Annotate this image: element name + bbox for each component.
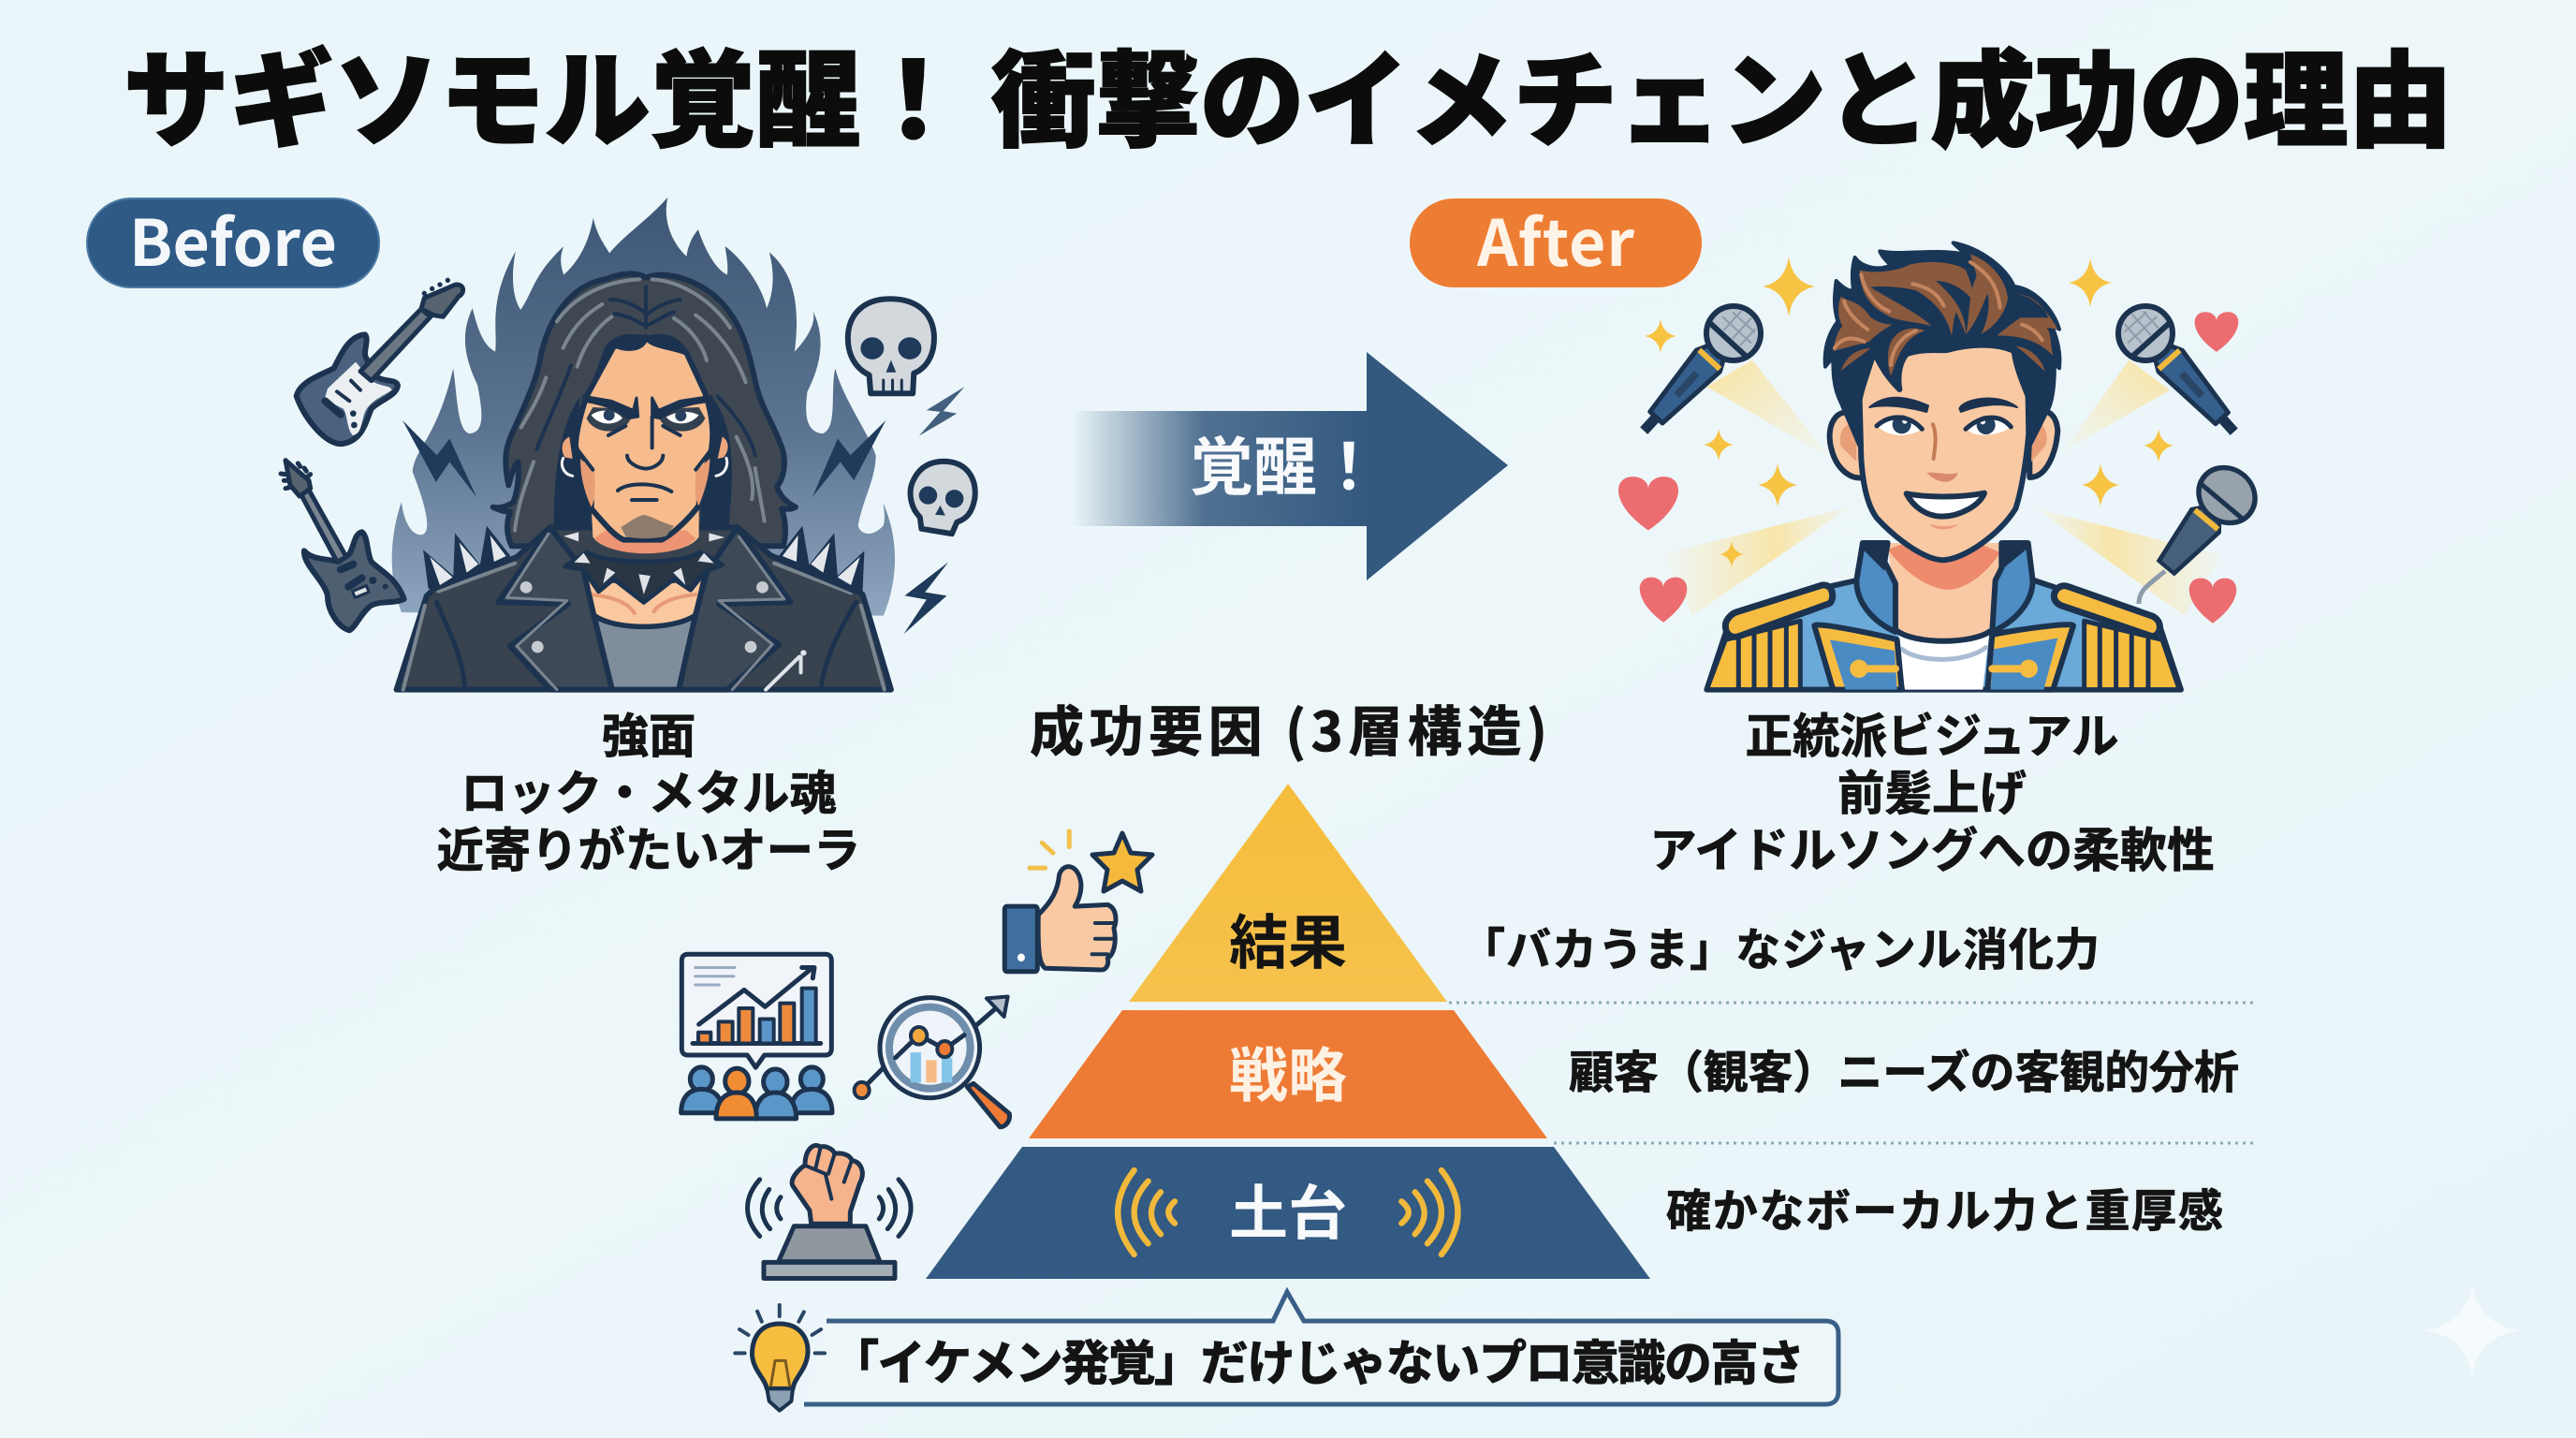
hearts (1618, 312, 2238, 624)
text: before traits: 強面 (602, 699, 695, 767)
icon: magnifying glass with chart (855, 997, 1010, 1127)
dotted leader lines (1449, 1003, 2254, 1143)
long hair (493, 273, 796, 546)
text: after traits: アイドルソングへの柔軟性 (1649, 812, 2215, 881)
badge: Before (87, 192, 379, 287)
light beams (1664, 360, 2222, 616)
flames and lightning backdrop (392, 198, 895, 616)
callout box (804, 1292, 1838, 1404)
arrow: before to after (1071, 352, 1508, 580)
heading: success factors: 成功要因 (3層構造) (1030, 688, 1547, 767)
head and hair (1825, 242, 2059, 560)
title: サギソモル覚醒！ (124, 16, 966, 169)
tier labels: 顧客（観客）ニーズの客観的分析 (1569, 1035, 2239, 1101)
tier labels: 「バカうま」なジャンル消化力 (1460, 913, 2100, 978)
pyramid tier: result (1129, 784, 1447, 1002)
text: after traits: 正統派ビジュアル (1746, 697, 2118, 767)
spiked choker (564, 532, 724, 602)
skulls and small bolts (848, 299, 975, 634)
illustration: before character, metal rocker (281, 198, 975, 690)
title: 衝撃のイメチェンと成功の理由 (991, 18, 2452, 169)
badge: After: After (1476, 192, 1634, 285)
decorative sparkle watermark (2425, 1284, 2519, 1376)
pyramid tier: strategy: 戦略 (1229, 1029, 1347, 1114)
tier labels (1460, 913, 2239, 1240)
jacket (1706, 543, 2181, 690)
text: after traits (1649, 697, 2215, 881)
text: before traits (437, 699, 860, 881)
icon: thumbs up with star (1004, 831, 1116, 972)
pyramid tier: strategy (1029, 1010, 1547, 1138)
icon: sound waves (1118, 1170, 1457, 1255)
icon: star (1092, 833, 1152, 891)
microphones (1625, 295, 2266, 604)
text: before traits: 近寄りがたいオーラ (437, 814, 860, 881)
icon: presentation with audience (681, 954, 832, 1119)
pyramid (926, 784, 1650, 1279)
tier labels: 確かなボーカル力と重厚感 (1666, 1174, 2223, 1240)
icon: raised fist on podium (748, 1145, 911, 1278)
text: before traits: ロック・メタル魂 (461, 756, 837, 824)
pyramid tier: foundation (926, 1147, 1650, 1279)
pyramid tier: foundation: 土台 (1229, 1167, 1347, 1252)
jacket and studs (397, 526, 891, 690)
arrow: before to after: 覚醒！ (1190, 416, 1381, 508)
text: after traits: 前髪上げ (1837, 755, 2027, 824)
ears, face and neck (562, 337, 728, 553)
icon: lightbulb (735, 1305, 825, 1411)
illustration: after character, idol (1664, 242, 2222, 690)
sparkles (1645, 257, 2174, 567)
badge: After (1410, 192, 1702, 287)
callout box: 「イケメン発覚」だけじゃないプロ意識の高さ (831, 1325, 1805, 1394)
pyramid tier: result: 結果 (1229, 896, 1347, 981)
guitars (281, 278, 463, 630)
badge: Before: Before (129, 192, 337, 285)
